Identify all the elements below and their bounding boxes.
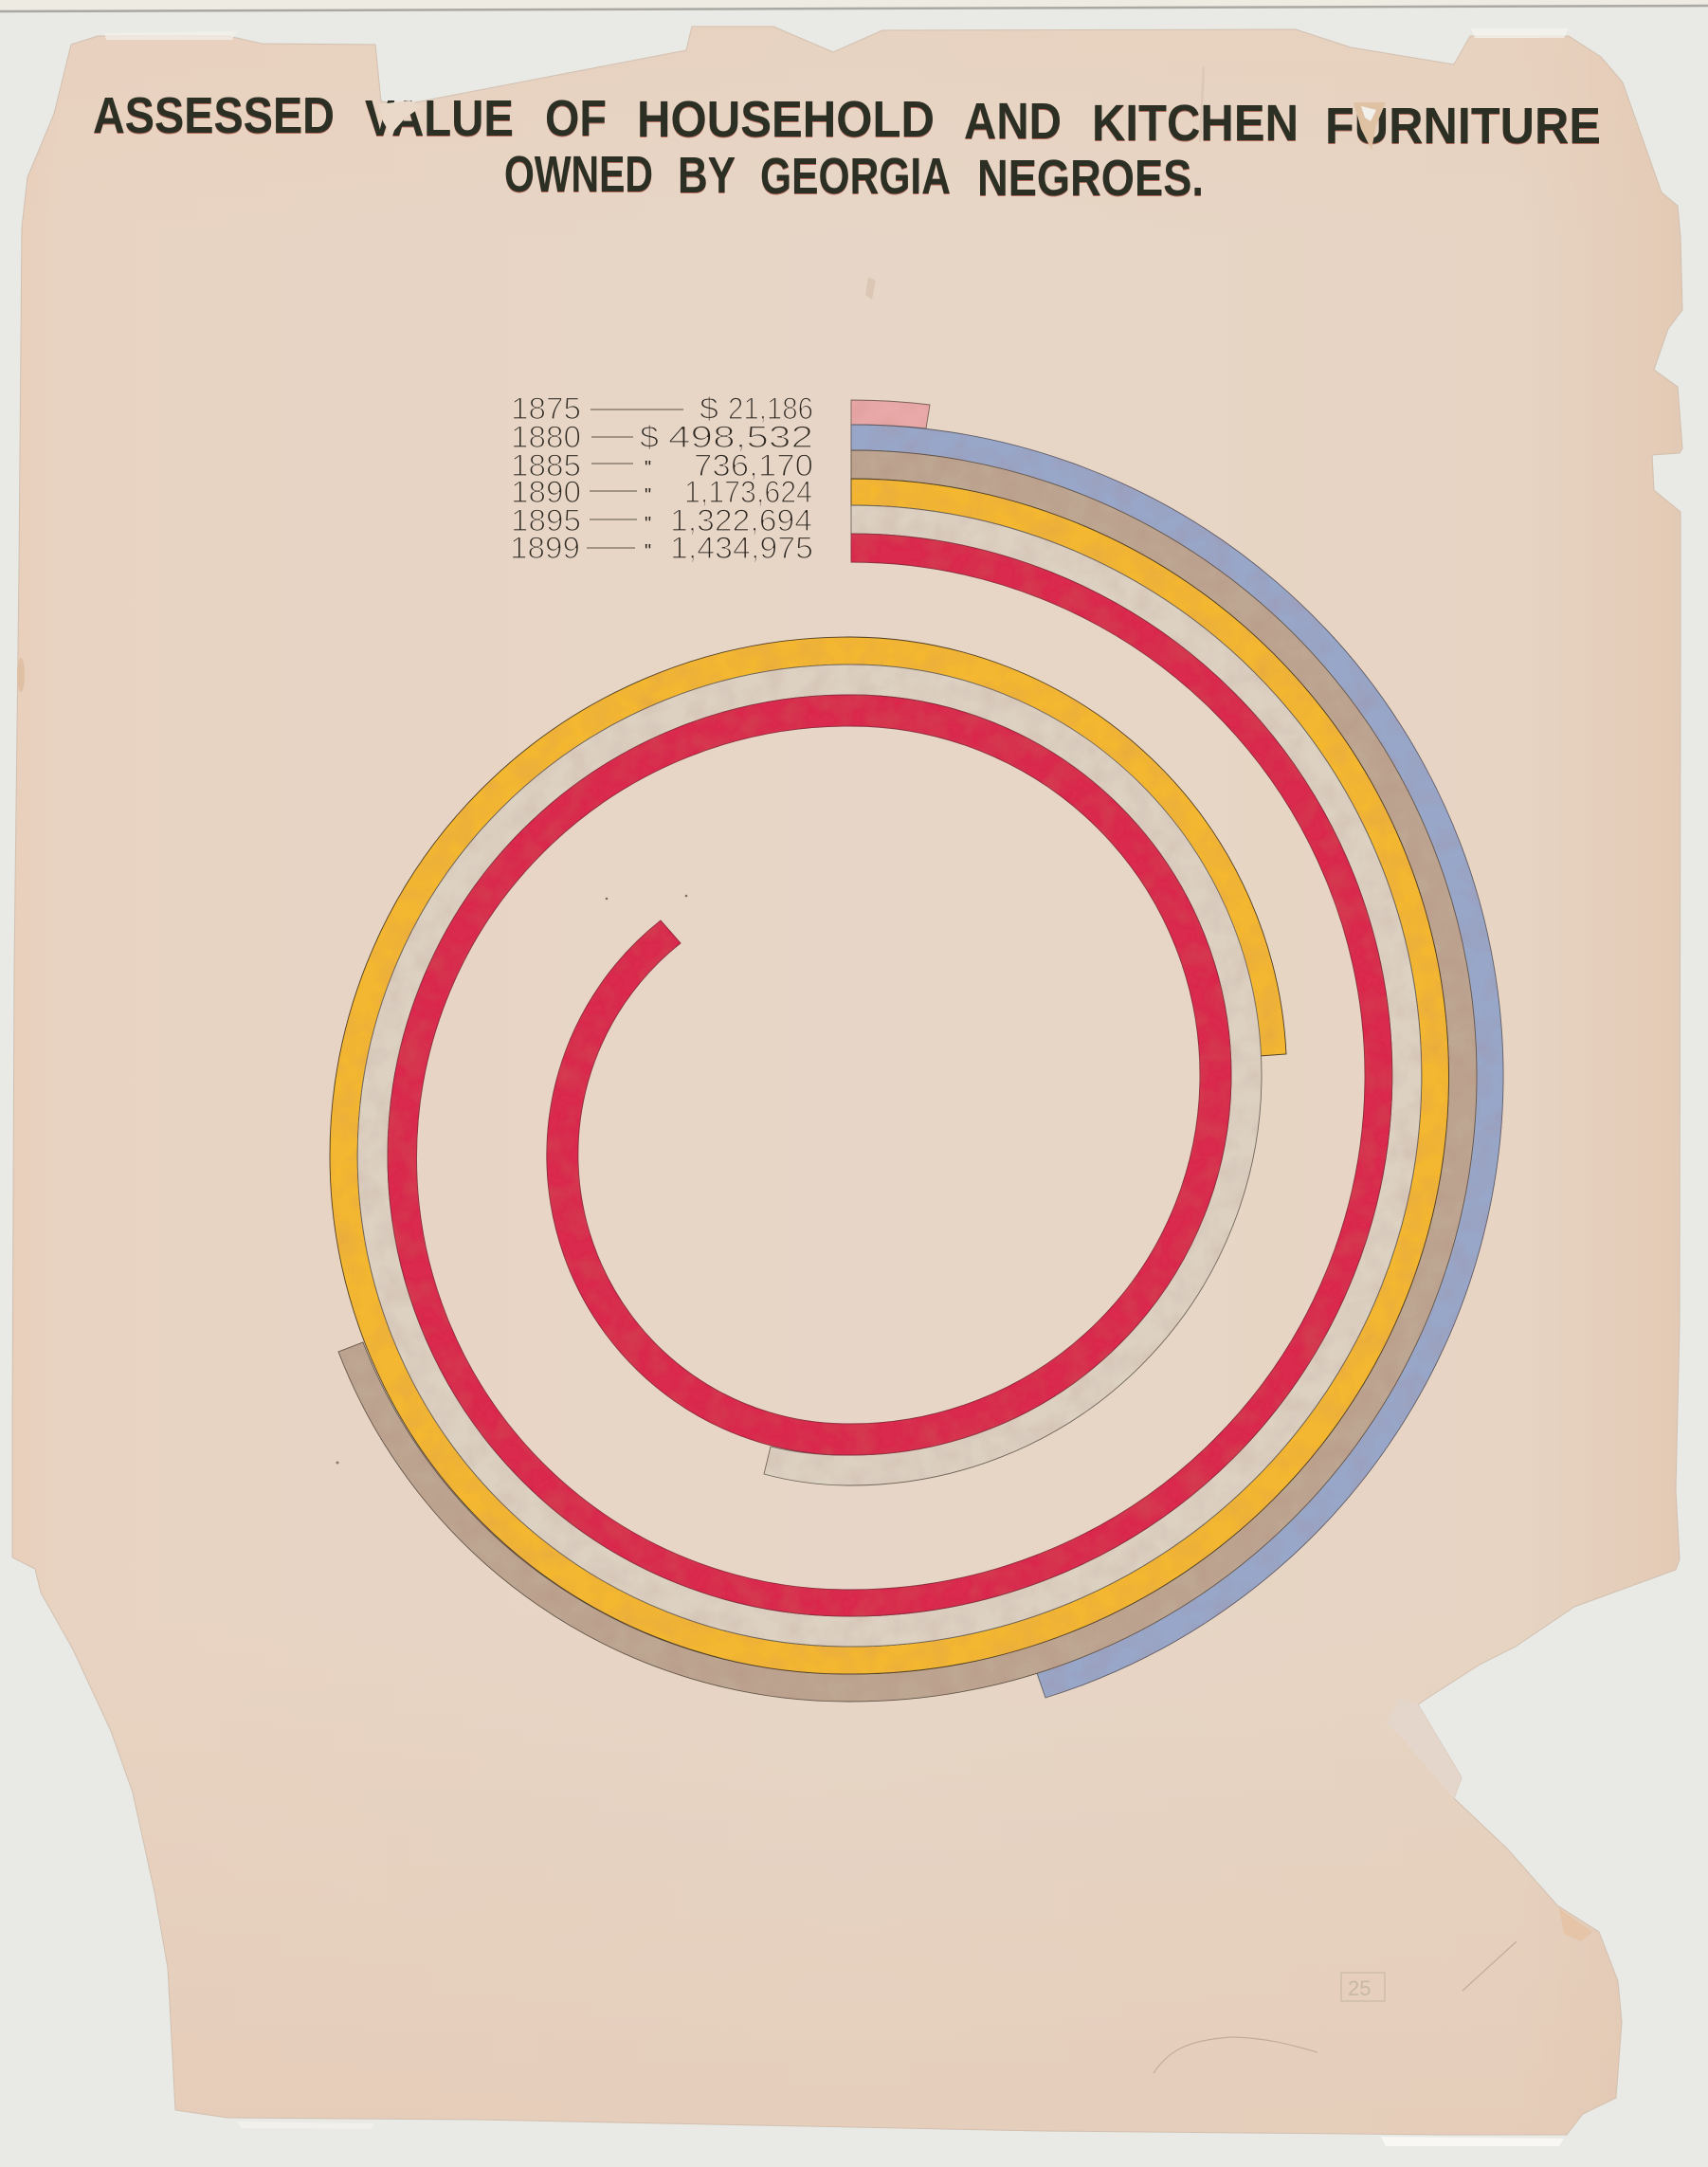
title line 2: NEGROES. [977, 150, 1204, 207]
title line 1: AND [964, 93, 1062, 150]
legend row 1880: 1880 [511, 420, 581, 454]
title line 1: KITCHEN [1092, 95, 1299, 152]
legend row 1875 [511, 392, 813, 426]
legend row 1895: 1,322,694 [670, 503, 812, 537]
title line 1: OF [545, 90, 607, 147]
legend row 1875: 1875 [511, 392, 581, 426]
spiral chart [330, 400, 1503, 1702]
legend row 1875: 21,186 [728, 392, 813, 426]
title line 1: FURNITURE [1325, 98, 1601, 155]
legend row 1890: " [645, 485, 651, 506]
title line 2: BY [678, 147, 736, 204]
legend row 1880: $ [640, 420, 659, 454]
legend row 1890: 1890 [511, 475, 581, 509]
legend row 1880: 498,532 [668, 420, 813, 454]
band 1880 blue [851, 425, 1503, 1698]
legend: years and values [510, 392, 813, 565]
band 1890 yellow [330, 479, 1448, 1674]
legend row 1895 [511, 503, 812, 537]
page number stamp [1341, 1973, 1385, 2001]
title line 2 [504, 146, 1204, 207]
tears across the title lettering [379, 100, 1386, 150]
legend row 1885: 736,170 [694, 448, 813, 483]
legend row 1890 [511, 475, 812, 509]
legend row 1875: $ [700, 392, 718, 426]
legend row 1885 [511, 448, 813, 483]
title [93, 87, 1601, 207]
legend row 1885: " [645, 458, 651, 479]
title line 2: OWNED [504, 146, 653, 203]
band 1895 grey [357, 505, 1422, 1647]
legend row 1895: " [645, 514, 651, 535]
band 1885 brown [338, 450, 1477, 1702]
legend row 1895: 1895 [511, 503, 581, 537]
legend row 1880 [511, 420, 813, 454]
legend row 1899 [510, 531, 813, 565]
legend row 1890: 1,173,624 [684, 475, 812, 509]
band 1875 pink [851, 400, 930, 428]
title line 1: VALUE [365, 90, 514, 147]
title line 1: HOUSEHOLD [637, 91, 935, 148]
legend row 1885: 1885 [511, 448, 581, 483]
legend row 1899: " [645, 541, 651, 562]
title line 2: GEORGIA [760, 148, 951, 205]
title line 1: ASSESSED [93, 87, 335, 144]
legend row 1899: 1,434,975 [670, 531, 813, 565]
legend row 1899: 1899 [510, 531, 580, 565]
title line 1 [93, 87, 1601, 155]
band 1899 red [388, 534, 1392, 1616]
page number stamp: 25 [1348, 1976, 1371, 2000]
